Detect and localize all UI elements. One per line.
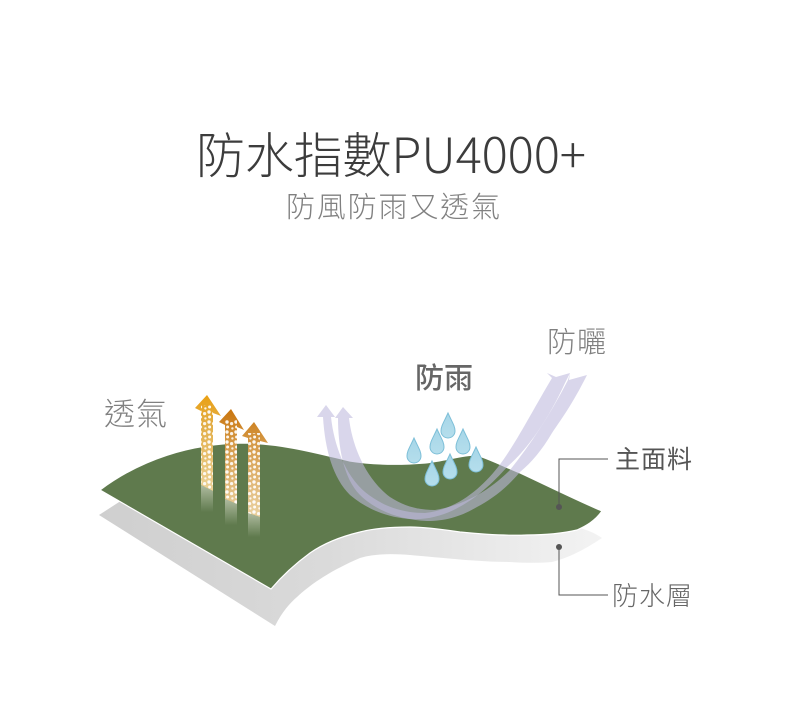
callout: 主面料 bbox=[556, 440, 692, 510]
arrow: outer curve bbox=[317, 373, 570, 519]
label: 防雨: 防雨 bbox=[415, 355, 473, 397]
waterproof layer bbox=[99, 495, 602, 626]
label: 透氣: 透氣 bbox=[104, 389, 167, 434]
icon: breathable arrows bbox=[195, 395, 268, 537]
label: 防曬: 防曬 bbox=[547, 319, 606, 361]
callout: 防水層: 防水層 bbox=[612, 576, 692, 613]
icon: rain drops bbox=[407, 413, 483, 486]
callout: 防水層 bbox=[556, 544, 692, 613]
main fabric bbox=[100, 443, 602, 589]
arrow 2 bbox=[219, 409, 244, 525]
callout: 主面料: 主面料 bbox=[615, 440, 692, 476]
arrow 3 bbox=[242, 422, 268, 537]
arrows: sun deflected bbox=[317, 373, 587, 521]
subtitle: 防風防雨又透氣 bbox=[286, 184, 500, 226]
arrow 1 bbox=[195, 395, 221, 512]
arrow: inner curve bbox=[335, 373, 587, 521]
title: 防水指數PU4000+ bbox=[196, 117, 586, 188]
